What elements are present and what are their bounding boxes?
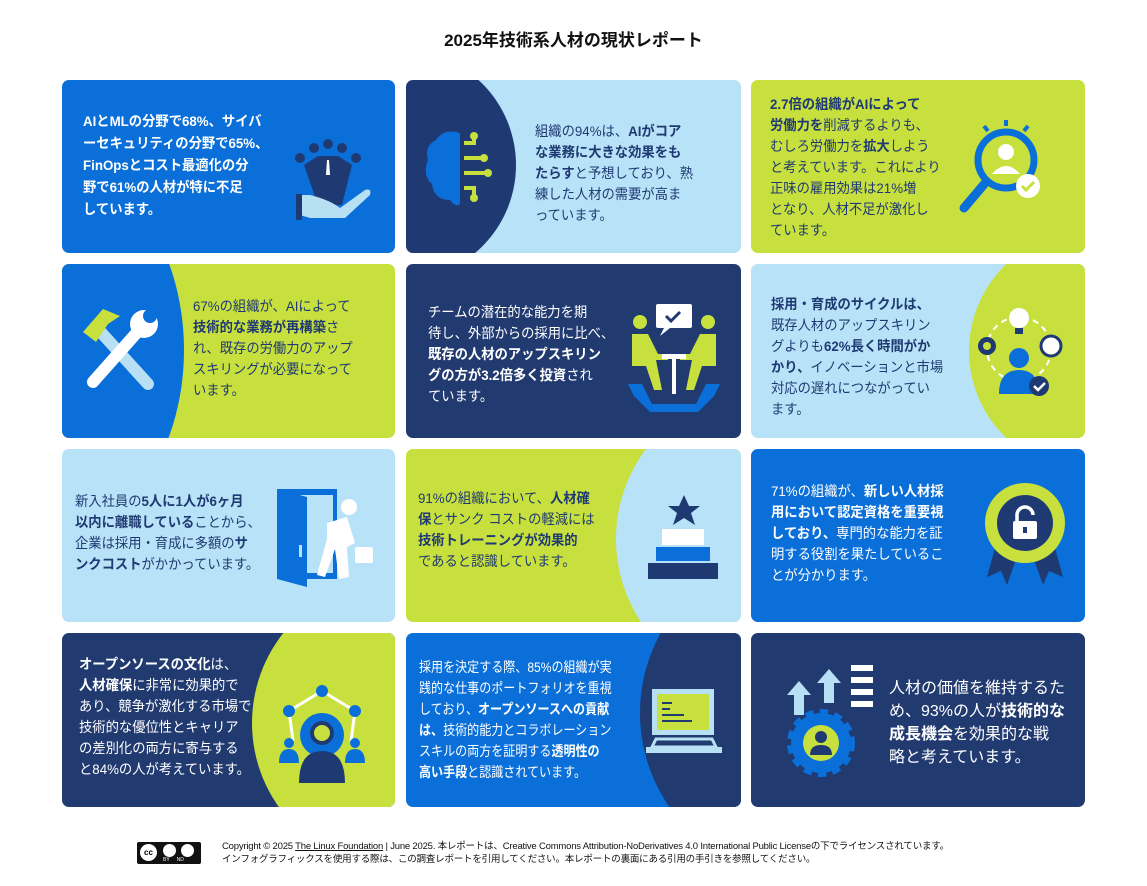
text 7: 以内に離職していることから、 [75, 514, 261, 530]
text 9: 用において認定資格を重要視 [771, 504, 944, 520]
text 2: 練した人材の需要が高ま [535, 186, 681, 202]
text 10: と84%の人が考えています。 [79, 761, 250, 777]
panel 8 [406, 449, 741, 622]
panel 2 [406, 80, 741, 253]
icon: tools [83, 309, 158, 390]
text 11: 高い手段と認識されています。 [419, 764, 586, 780]
text 4: スキリングが必要になって [193, 361, 352, 377]
text 3: と考えています。これにより [770, 159, 941, 175]
footer text [222, 840, 949, 865]
text 11: 採用を決定する際、85%の組織が実 [419, 659, 612, 675]
panel 6 [751, 264, 1085, 438]
panel 11 [406, 633, 741, 807]
footer text: Copyright © 2025 The Linux Foundation | June 2025. 本レポートは、Creative Commons Attribution-NoDerivatives 4.0 International Public Licenseの下でライセンスされています。 [222, 841, 949, 852]
text 6: 採用・育成のサイクルは、 [771, 296, 930, 312]
text 8: であると認識しています。 [418, 553, 576, 569]
text 1: AIとMLの分野で68%、サイバ [83, 113, 262, 129]
panel 5 [406, 264, 741, 438]
text 8: 保とサンク コストの軽減には [418, 511, 595, 527]
icon: brain [426, 132, 492, 206]
text 6: ます。 [771, 401, 810, 417]
text 8: 技術トレーニングが効果的 [418, 532, 578, 548]
text 2: っています。 [535, 207, 613, 223]
text 10: あり、競争が激化する市場で [79, 698, 251, 714]
text 9: 明する役割を果たしているこ [771, 546, 944, 562]
text 7 [75, 493, 261, 572]
text 4: 技術的な業務が再構築さ [193, 319, 339, 335]
text 10: 人材確保に非常に効果的で [79, 677, 239, 693]
text 11: しており、オープンソースへの貢献 [419, 701, 609, 717]
text 4: います。 [193, 382, 245, 398]
panel 12 [751, 633, 1085, 807]
text 10: 技術的な優位性とキャリア [79, 719, 239, 735]
text 6: かり、イノベーションと市場 [771, 359, 943, 375]
icon: meeting [628, 304, 720, 412]
text 11 [419, 659, 612, 780]
text 2: たらすと予想しており、熟 [535, 165, 693, 181]
icon: network people [279, 685, 365, 783]
text 1: しています。 [83, 201, 161, 217]
text 8 [418, 490, 595, 569]
icon: stacked podium [648, 495, 718, 579]
text 5: 待し、外部からの採用に比べ、 [428, 325, 614, 341]
icon: gear with arrows [787, 665, 873, 777]
text 3 [770, 96, 941, 238]
text 2: 組織の94%は、AIがコア [535, 123, 681, 139]
icon: cc license: cc [144, 848, 153, 857]
text 11: は、技術的能力とコラボレーション [419, 722, 611, 738]
text 11: スキルの両方を証明する透明性の [419, 743, 600, 759]
icon: cc license [137, 842, 201, 864]
text 2 [535, 123, 693, 223]
panel 4 [62, 264, 395, 438]
text 6: 既存人材のアップスキリン [771, 317, 931, 333]
text 4 [193, 298, 353, 398]
text 12: 略と考えています。 [889, 749, 1031, 766]
icon: cc license: BY ND [163, 857, 184, 863]
text 12: め、93%の人が技術的な [889, 703, 1065, 720]
text 3: ています。 [770, 222, 835, 238]
icon: hand with people [295, 139, 370, 220]
icon: person with gears [978, 308, 1062, 396]
text 4: れ、既存の労働力のアップ [193, 340, 353, 356]
text 9: とが分かります。 [771, 567, 876, 583]
text 1 [83, 113, 268, 217]
text 7: ンクコストがかかっています。 [75, 556, 259, 572]
panel 9 [751, 449, 1085, 622]
text 5: チームの潜在的な能力を期 [428, 304, 587, 320]
text 9 [771, 483, 944, 583]
text 9: 71%の組織が、新しい人材採 [771, 483, 944, 499]
text 6 [771, 296, 943, 417]
text 10: オープンソースの文化は、 [79, 656, 237, 672]
footer text: インフォグラフィックスを使用する際は、この調査レポートを引用してください。本レポートの裏面にある引用の手引きを参照してください。 [222, 854, 815, 865]
text 10 [79, 656, 251, 777]
text 12: 成長機会を効果的な戦 [889, 726, 1049, 743]
text 5 [428, 304, 614, 404]
text 3: 2.7倍の組織がAIによって [770, 96, 920, 112]
text 2: な業務に大きな効果をも [535, 144, 681, 160]
title: 2025年技術系人材の現状レポート [444, 31, 703, 50]
text 7: 新入社員の5人に1人が6ヶ月 [75, 493, 243, 509]
text 1: 野で61%の人材が特に不足 [83, 179, 243, 195]
panel 1 [62, 80, 395, 253]
text 12: 人材の価値を維持するた [889, 680, 1065, 697]
panel 7 [62, 449, 395, 622]
panel 3 [751, 80, 1085, 253]
text 10: の差別化の両方に寄与する [79, 740, 239, 756]
text 6: グよりも62%長く時間がか [771, 338, 930, 354]
text 3: となり、人材不足が激化し [770, 201, 929, 217]
text 3: むしろ労働力を拡大しよう [770, 138, 930, 154]
text 8: 91%の組織において、人材確 [418, 490, 590, 506]
icon: magnifier person [960, 120, 1040, 212]
text 12 [889, 679, 1065, 766]
icon: door exit [277, 489, 373, 587]
text 4: 67%の組織が、AIによって [193, 298, 351, 314]
text 6: 対応の遅れにつながってい [771, 380, 930, 396]
text 9: しており、専門的な能力を証 [771, 525, 943, 541]
text 5: 既存の人材のアップスキリン [428, 346, 601, 362]
icon: laptop code [646, 689, 722, 753]
text 1: FinOpsとコスト最適化の分 [83, 157, 249, 173]
panel 10 [62, 633, 395, 807]
text 3: 正味の雇用効果は21%増 [770, 180, 916, 196]
text 5: ています。 [428, 388, 493, 404]
text 5: グの方が3.2倍多く投資され [428, 367, 593, 383]
text 11: 践的な仕事のポートフォリオを重視 [419, 680, 612, 696]
text 1: ーセキュリティの分野で65%、 [83, 135, 268, 151]
icon: badge lock [985, 483, 1065, 585]
text 7: 企業は採用・育成に多額のサ [75, 535, 248, 551]
text 3: 労働力を削減するよりも、 [770, 117, 929, 133]
